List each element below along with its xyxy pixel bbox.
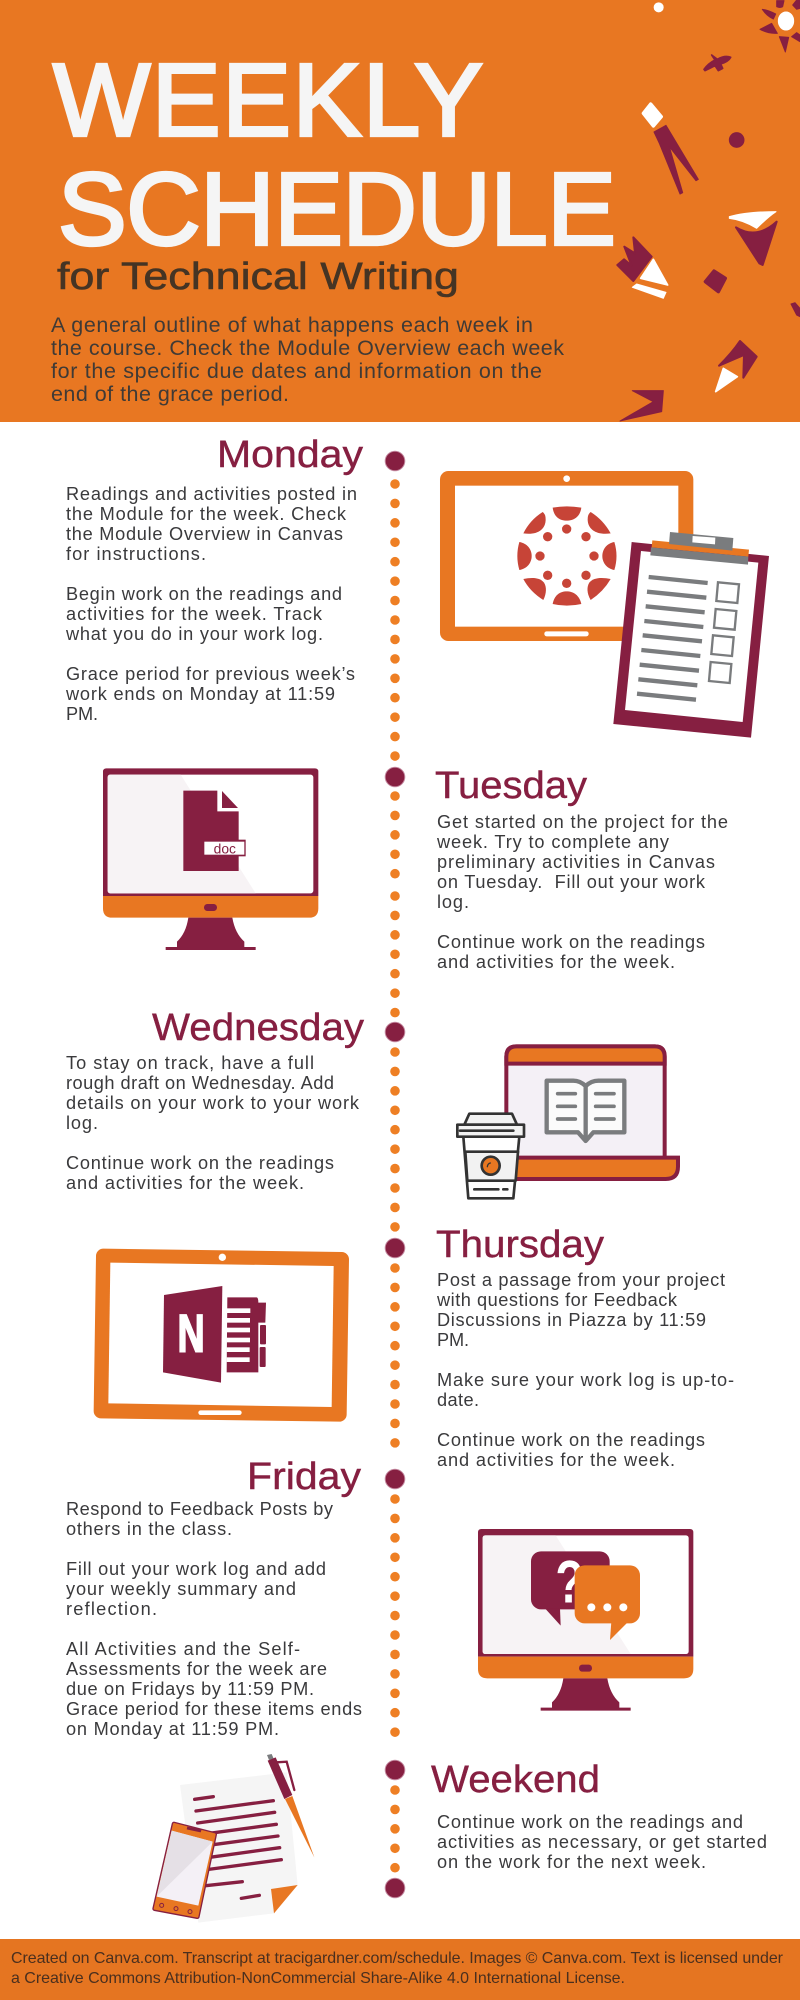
icon: tablet with canvas logo and clipboard: [440, 471, 769, 738]
panel: thursday: [436, 1224, 734, 1470]
text: friday: Grace period for these items ends: [66, 1699, 362, 1719]
panel: tuesday: [435, 765, 728, 972]
text: wednesday: rough draft on Wednesday. Add: [66, 1073, 334, 1093]
doc file: [183, 791, 246, 871]
open book: [547, 1081, 624, 1141]
text: tuesday: preliminary activities in Canvas: [437, 852, 715, 872]
text: tuesday: on Tuesday. Fill out your work: [437, 872, 706, 892]
heading: monday: Monday: [217, 434, 363, 476]
title: schedule: SCHEDULE: [58, 152, 616, 266]
doc file: doc: [214, 840, 236, 856]
icon: laptop with book and coffee cup: [457, 1046, 678, 1198]
text: wednesday: To stay on track, have a full: [66, 1053, 314, 1073]
text: thursday: Discussions in Piazza by 11:59: [437, 1310, 706, 1330]
text: wednesday: Continue work on the readings: [66, 1153, 334, 1173]
text: friday: your weekly summary and: [66, 1579, 296, 1599]
intro text: for the specific due dates and information on the: [51, 359, 542, 383]
icon: monitor with doc file: [103, 768, 318, 950]
subtitle: for Technical Writing: [57, 256, 459, 298]
text: weekend: on the work for the next week.: [437, 1852, 706, 1872]
text: friday: Respond to Feedback Posts by: [66, 1499, 334, 1519]
title: weekly: WEEKLY: [53, 42, 483, 158]
intro text: the course. Check the Module Overview each week: [51, 336, 564, 360]
text: friday: due on Fridays by 11:59 PM.: [66, 1679, 314, 1699]
text: wednesday: [66, 1053, 360, 1193]
question bubble: ?: [555, 1549, 584, 1616]
question bubble: [531, 1549, 610, 1626]
intro text: A general outline of what happens each week in: [51, 313, 533, 337]
text: monday: the Module Overview in Canvas: [66, 524, 343, 544]
text: friday: [66, 1499, 362, 1739]
text: thursday: and activities for the week.: [437, 1450, 675, 1470]
coffee cup: [457, 1114, 524, 1198]
text: thursday: PM.: [437, 1330, 469, 1350]
panel: wednesday: [66, 1007, 364, 1193]
text: monday: Readings and activities posted in: [66, 484, 357, 504]
chat bubble: [575, 1565, 640, 1640]
text: thursday: Continue work on the readings: [437, 1430, 705, 1450]
text: thursday: Post a passage from your project: [437, 1270, 725, 1290]
text: tuesday: log.: [437, 892, 469, 912]
panel: weekend: [431, 1759, 767, 1872]
text: monday: the Module for the week. Check: [66, 504, 347, 524]
timeline: [385, 451, 405, 1898]
footer: [0, 1939, 800, 2000]
heading: friday: Friday: [247, 1456, 361, 1498]
text: tuesday: week. Try to complete any: [436, 832, 670, 852]
phone: [155, 1824, 215, 1917]
text: weekend: activities as necessary, or get started: [437, 1832, 767, 1852]
intro text: [51, 313, 564, 406]
panel: monday: [65, 434, 363, 724]
icon: monitor with chat bubbles: [478, 1529, 693, 1711]
text: thursday: [436, 1270, 734, 1470]
text: thursday: with questions for Feedback: [436, 1290, 678, 1310]
text: friday: others in the class.: [66, 1519, 232, 1539]
text: monday: Grace period for previous week’s: [66, 664, 355, 684]
heading: wednesday: Wednesday: [152, 1007, 364, 1049]
text: tuesday: and activities for the week.: [437, 952, 675, 972]
clipboard: [613, 532, 769, 738]
text: weekend: [437, 1812, 767, 1872]
laptop: [506, 1046, 678, 1179]
text: friday: on Monday at 11:59 PM.: [66, 1719, 279, 1739]
text: thursday: Make sure your work log is up-to-: [437, 1370, 734, 1390]
text: tuesday: Continue work on the readings: [437, 932, 705, 952]
onenote logo: N: [178, 1305, 205, 1364]
text: monday: for instructions.: [66, 544, 206, 564]
heading: weekend: Weekend: [431, 1759, 600, 1801]
text: monday: Begin work on the readings and: [66, 584, 342, 604]
decorative confetti shapes: [617, 0, 800, 421]
paper: [180, 1772, 298, 1923]
text: monday: work ends on Monday at 11:59: [65, 684, 335, 704]
text: friday: reflection.: [66, 1599, 157, 1619]
pen: [267, 1754, 314, 1857]
icon: paper, pen and phone: [155, 1754, 314, 1923]
text: friday: All Activities and the Self-: [66, 1639, 300, 1659]
footer: a Creative Commons Attribution-NonCommercial Share-Alike 4.0 International License.: [11, 1970, 625, 1987]
panel: header: [0, 0, 800, 422]
icon: tablet with onenote logo: [101, 1254, 342, 1415]
text: friday: Fill out your work log and add: [66, 1559, 326, 1579]
canvas logo: [517, 506, 616, 606]
text: tuesday: Get started on the project for the: [437, 812, 728, 832]
heading: thursday: Thursday: [436, 1224, 604, 1266]
text: monday: what you do in your work log.: [65, 624, 323, 644]
text: weekend: Continue work on the readings and: [437, 1812, 743, 1832]
text: monday: activities for the week. Track: [66, 604, 323, 624]
text: monday: PM.: [66, 704, 98, 724]
text: wednesday: and activities for the week.: [66, 1173, 304, 1193]
footer: Created on Canva.com. Transcript at tracigardner.com/schedule. Images © Canva.com. Text is licensed under: [11, 1950, 784, 1967]
intro text: end of the grace period.: [51, 382, 289, 406]
onenote logo: [163, 1286, 266, 1383]
text: monday: [65, 484, 357, 724]
heading: tuesday: Tuesday: [435, 765, 587, 807]
text: wednesday: log.: [66, 1113, 98, 1133]
text: thursday: date.: [437, 1390, 479, 1410]
panel: friday: [66, 1456, 362, 1739]
text: tuesday: [436, 812, 728, 972]
tablet: [440, 471, 693, 641]
text: friday: Assessments for the week are: [66, 1659, 327, 1679]
text: wednesday: details on your work to your work: [66, 1093, 360, 1113]
